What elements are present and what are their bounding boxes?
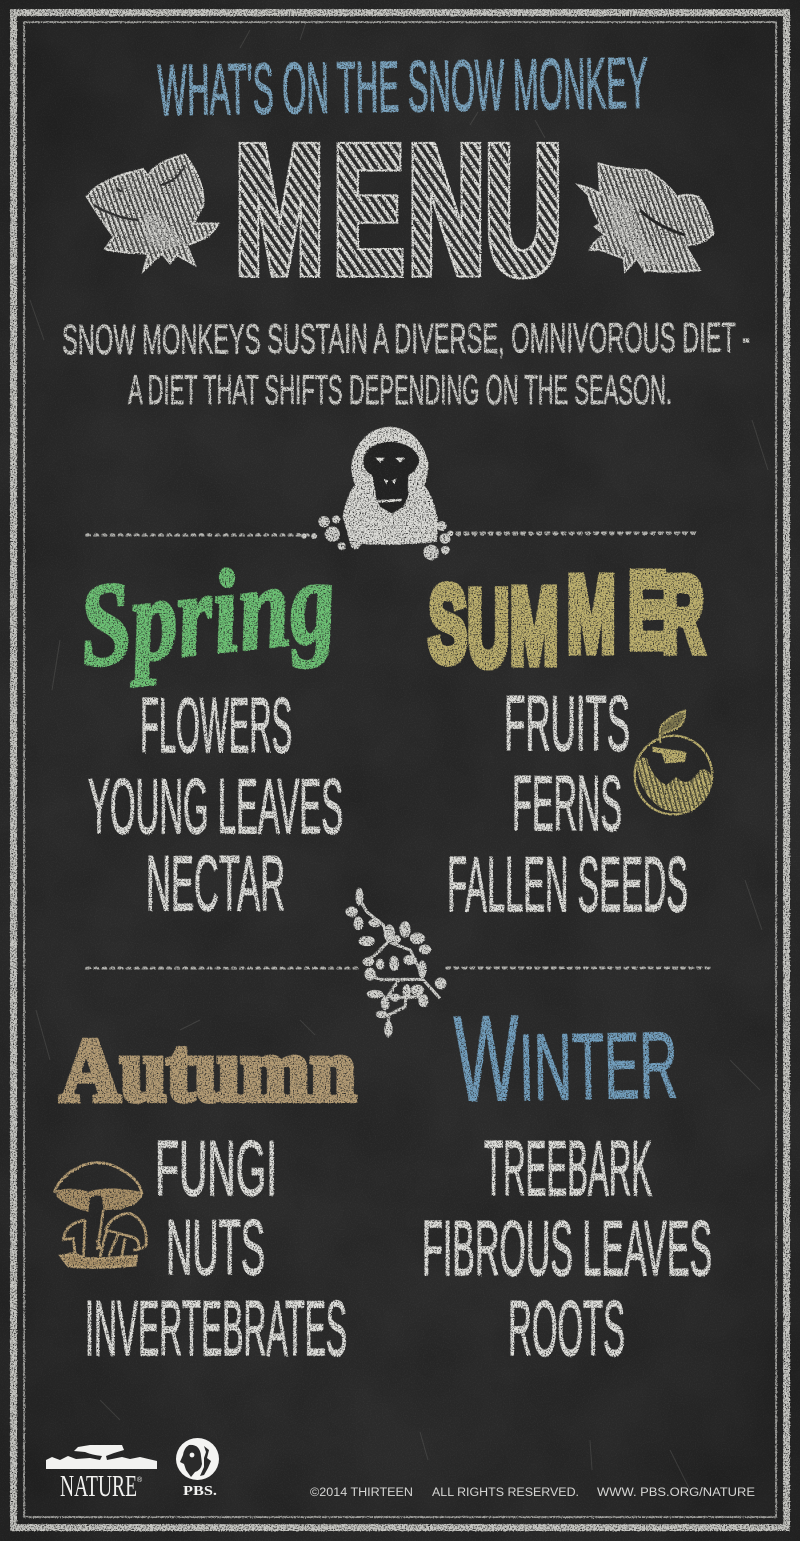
winter food list <box>422 1124 712 1372</box>
footer credits: ©2014 THIRTEEN <box>310 1487 413 1499</box>
summer food list: FERNS <box>512 759 622 847</box>
spring food list <box>88 681 343 927</box>
autumn food list: FUNGI <box>155 1124 277 1212</box>
autumn food list <box>85 1124 347 1372</box>
divider: upper dotted line <box>88 532 700 536</box>
icon: right leaf bundle <box>578 163 713 272</box>
chalkboard infographic: INVERTEBRATES <box>85 1284 347 1372</box>
season: autumn: Autumn <box>60 1021 356 1120</box>
icon: left leaf bundle <box>87 154 218 271</box>
season: winter: WINTER <box>453 987 678 1127</box>
winter food list: ROOTS <box>508 1284 625 1372</box>
summer food list <box>447 679 688 928</box>
spring food list: NECTAR <box>146 839 285 927</box>
logo: nature <box>46 1445 157 1503</box>
logo: nature: ® <box>137 1476 143 1484</box>
logo: nature: NATURE <box>60 1468 137 1503</box>
footer credits: WWW. PBS.ORG/NATURE <box>597 1487 755 1499</box>
footer credits <box>310 1487 755 1499</box>
season: summer: SUMMER <box>428 550 704 689</box>
chalkboard infographic: YOUNG LEAVES <box>88 762 343 850</box>
icon: branch <box>346 888 446 1036</box>
icon: apple <box>635 711 712 814</box>
logo: pbs <box>176 1438 219 1499</box>
title: menu: MENU <box>235 107 562 312</box>
icon: mushrooms <box>54 1163 146 1267</box>
footer credits: ALL RIGHTS RESERVED. <box>432 1487 579 1499</box>
icon: snow monkey <box>301 427 453 560</box>
autumn food list: NUTS <box>166 1203 265 1291</box>
divider: lower dotted line <box>88 967 712 969</box>
spring food list: FLOWERS <box>140 681 292 769</box>
summer food list: FRUITS <box>504 679 630 767</box>
intro text <box>62 314 750 413</box>
logo: pbs: PBS. <box>183 1484 217 1499</box>
season: spring: Spring <box>73 535 341 692</box>
